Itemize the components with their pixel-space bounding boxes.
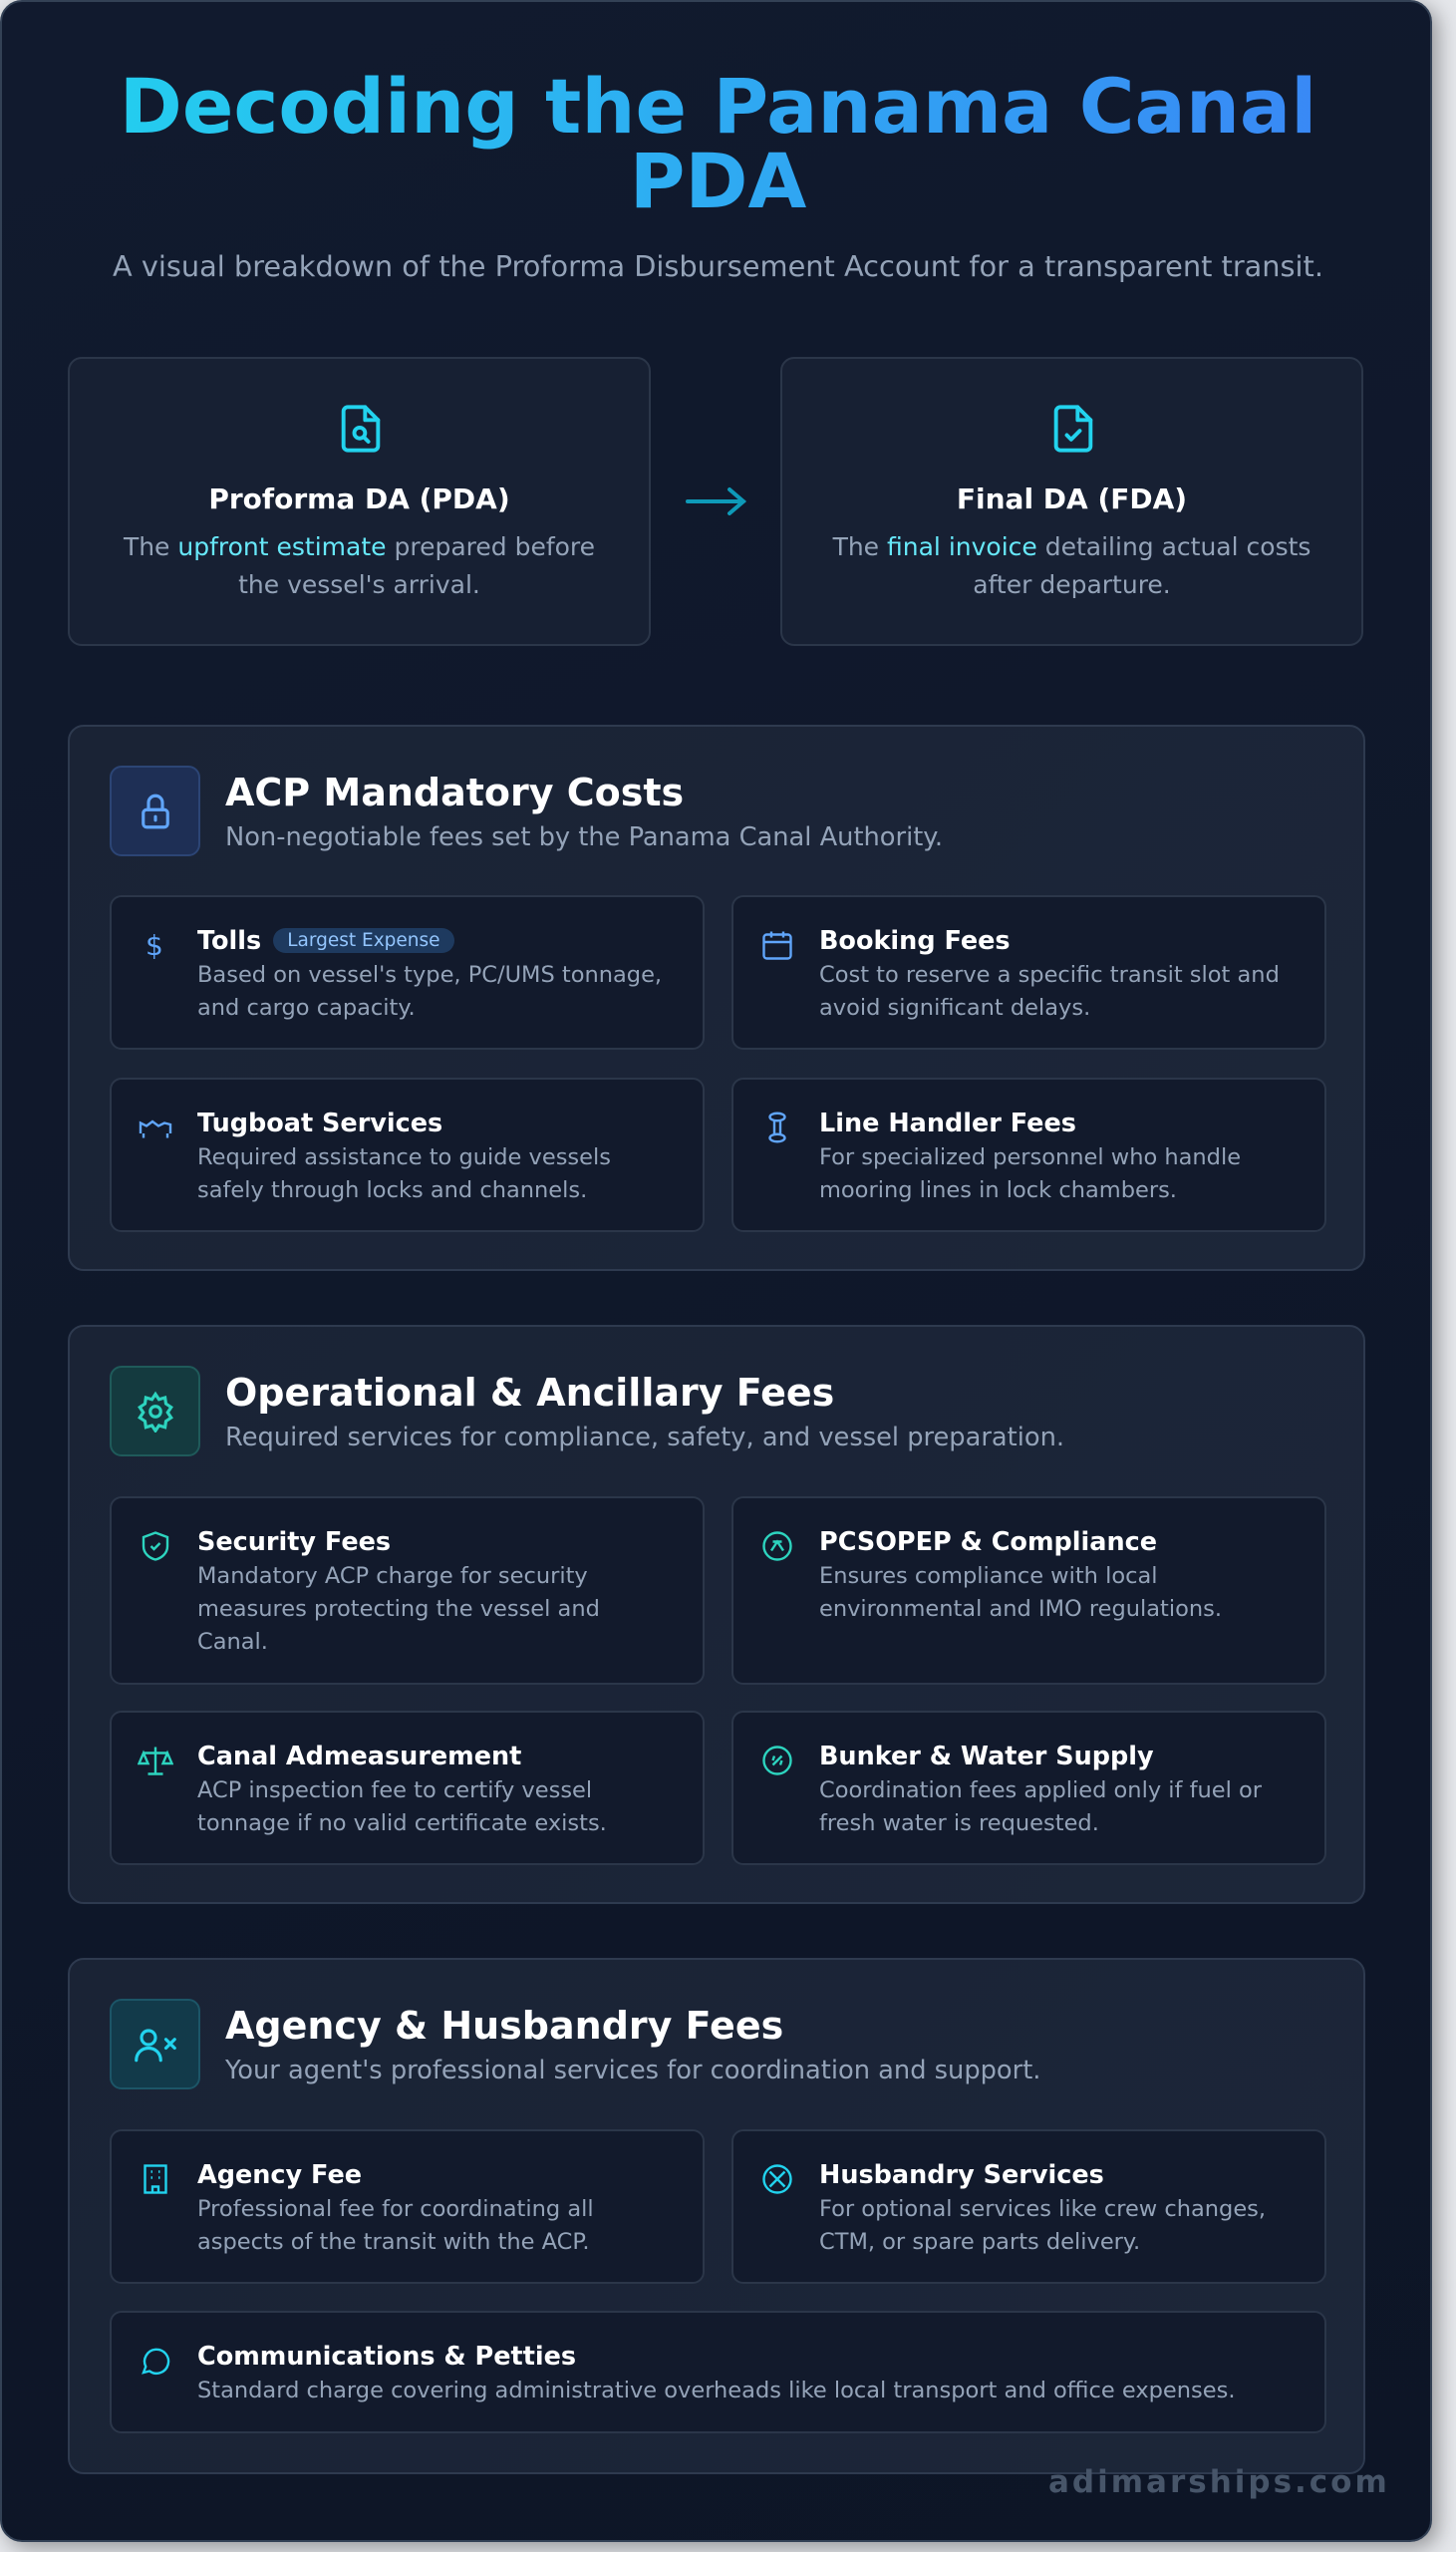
subheading: Non-negotiable fees set by the Panama Canal Authority. xyxy=(225,822,943,852)
card: admeasurement xyxy=(110,1711,705,1865)
card: PCSOPEP xyxy=(731,1496,1326,1685)
card: PCSOPEP: PCSOPEP & Compliance xyxy=(819,1527,1157,1557)
subheading: Your agent's professional services for coordination and support. xyxy=(225,2056,1040,2085)
heading: Operational & Ancillary Fees xyxy=(225,1371,834,1415)
heading: Proforma DA (PDA) xyxy=(208,482,510,515)
heading: ACP Mandatory Costs xyxy=(225,771,684,814)
card: admeasurement: ACP inspection fee to certify vessel tonnage if no valid certificate exists. xyxy=(197,1777,607,1836)
title: Decoding the Panama Canal xyxy=(120,62,1316,151)
icon: gear xyxy=(110,1366,200,1456)
panel: ACP mandatory costs xyxy=(68,725,1365,1271)
icon: document check xyxy=(1054,405,1092,453)
card: tolls xyxy=(110,895,705,1050)
card: communications: Communications & Petties xyxy=(197,2342,576,2372)
card: line handler xyxy=(731,1078,1326,1232)
card: PCSOPEP: Ensures compliance with local environmental and IMO regulations. xyxy=(819,1563,1222,1622)
card: booking fees xyxy=(731,895,1326,1050)
icon: document search xyxy=(341,405,381,453)
panel: proforma DA xyxy=(68,357,651,646)
text: The upfront estimate prepared before the vessel's arrival. xyxy=(124,532,595,599)
card: husbandry xyxy=(731,2129,1326,2284)
card: bunker xyxy=(731,1711,1326,1865)
title xyxy=(2,69,1434,218)
panel: final DA xyxy=(780,357,1363,646)
heading: Agency & Husbandry Fees xyxy=(225,2004,783,2048)
card: security: Security Fees xyxy=(197,1527,391,1557)
card: bunker: Coordination fees applied only if fuel or fresh water is requested. xyxy=(819,1777,1262,1836)
card: booking fees: Cost to reserve a specific transit slot and avoid significant delays. xyxy=(819,962,1280,1021)
icon: lock xyxy=(110,766,200,856)
card: agency fee xyxy=(110,2129,705,2284)
panel: agency & husbandry xyxy=(68,1958,1365,2474)
card: tugboat xyxy=(110,1078,705,1232)
heading: Final DA (FDA) xyxy=(957,482,1187,515)
card: tolls: Largest Expense xyxy=(287,930,440,951)
icon: user xyxy=(110,1999,200,2089)
card: security xyxy=(110,1496,705,1685)
watermark: adimarships.com xyxy=(1048,2464,1390,2500)
card: admeasurement: Canal Admeasurement xyxy=(197,1742,521,1771)
text: The final invoice detailing actual costs after departure. xyxy=(833,532,1310,599)
subheading: Required services for compliance, safety, and vessel preparation. xyxy=(225,1423,1064,1452)
card: husbandry: For optional services like crew changes, CTM, or spare parts delivery. xyxy=(819,2196,1266,2255)
panel: operational & ancillary xyxy=(68,1325,1365,1904)
card: line handler: For specialized personnel who handle mooring lines in lock chambers. xyxy=(819,1144,1241,1203)
card: agency fee: Agency Fee xyxy=(197,2160,362,2190)
title: PDA xyxy=(630,137,806,225)
card: tolls: $ xyxy=(146,929,163,962)
card: husbandry: Husbandry Services xyxy=(819,2160,1104,2190)
card: tolls: Based on vessel's type, PC/UMS tonnage, and cargo capacity. xyxy=(197,962,662,1021)
card: bunker: Bunker & Water Supply xyxy=(819,1742,1154,1771)
card: tugboat: Tugboat Services xyxy=(197,1109,442,1138)
card: line handler: Line Handler Fees xyxy=(819,1109,1076,1138)
card: tolls: Tolls xyxy=(197,926,261,956)
card: communications xyxy=(110,2311,1326,2433)
card: tugboat: Required assistance to guide vessels safely through locks and channels. xyxy=(197,1144,611,1203)
subtitle: A visual breakdown of the Proforma Disbursement Account for a transparent transit. xyxy=(113,249,1323,283)
card: booking fees: Booking Fees xyxy=(819,926,1011,956)
card: agency fee: Professional fee for coordinating all aspects of the transit with the ACP. xyxy=(197,2196,594,2255)
card: communications: Standard charge covering administrative overheads like local transport and office expenses. xyxy=(197,2378,1235,2403)
arrow xyxy=(686,486,746,516)
card: security: Mandatory ACP charge for security measures protecting the vessel and Canal. xyxy=(197,1563,600,1655)
